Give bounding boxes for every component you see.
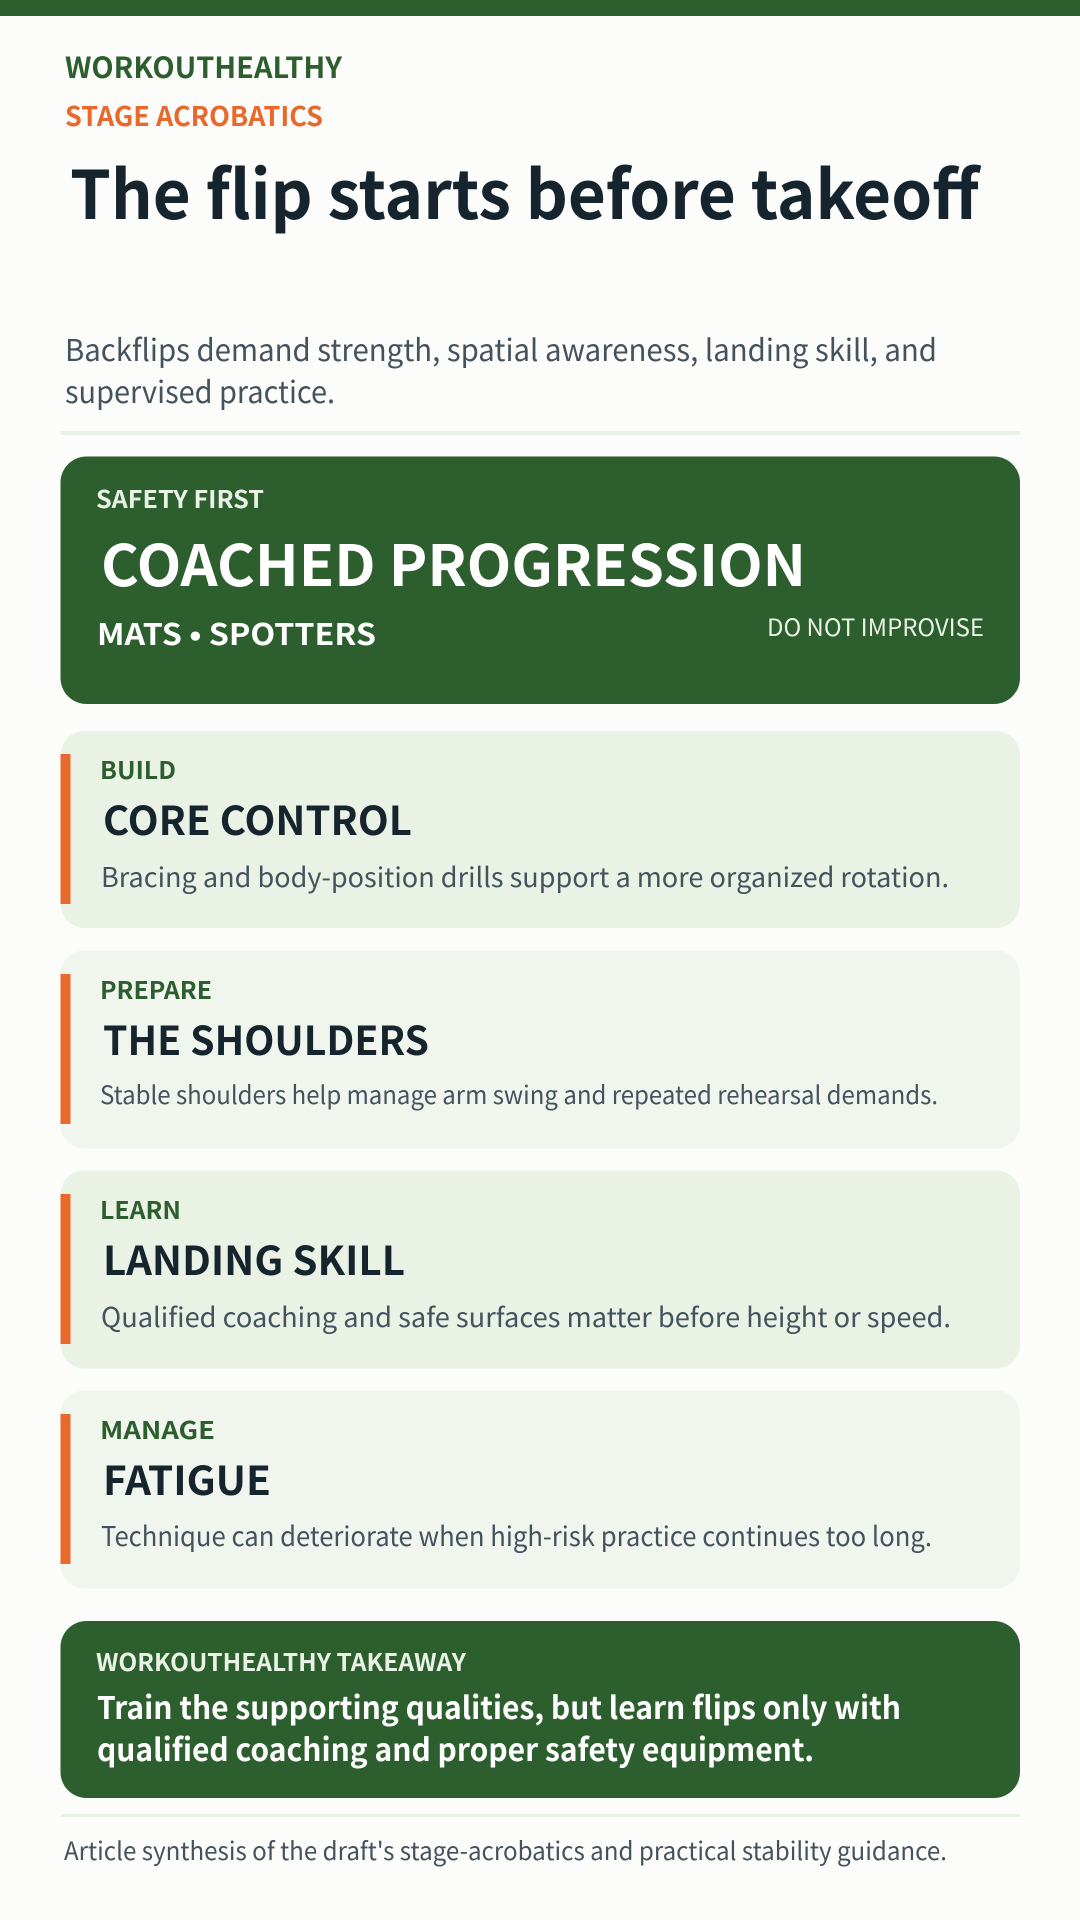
subtitle: supervised practice. (65, 368, 335, 412)
category label: STAGE ACROBATICS (65, 95, 323, 134)
brand name: WORKOUTHEALTHY (65, 45, 343, 87)
accent bar (60, 974, 70, 1124)
footer note: Article synthesis of the draft's stage-acrobatics and practical stability guidance. (64, 1832, 947, 1868)
safety label: SAFETY FIRST (96, 480, 264, 515)
accent bar (60, 754, 70, 904)
panel: manage (60, 1390, 1020, 1588)
accent bar (60, 1194, 70, 1344)
subtitle (65, 326, 937, 412)
panel: learn (60, 1170, 1020, 1368)
label: MANAGE (100, 1411, 215, 1446)
panel: safety first (60, 456, 1020, 704)
takeaway body: qualified coaching and proper safety equipment. (97, 1725, 814, 1770)
safety warning: DO NOT IMPROVISE (767, 608, 984, 643)
label: LEARN (100, 1191, 181, 1226)
takeaway body: Train the supporting qualities, but learn flips only with (97, 1683, 901, 1728)
panel: takeaway (60, 1621, 1020, 1798)
subtitle: Backflips demand strength, spatial awareness, landing skill, and (65, 326, 937, 370)
title: The flip starts before takeoff (70, 142, 982, 239)
heading: LANDING SKILL (103, 1229, 405, 1287)
panel: build (60, 731, 1020, 928)
description: Stable shoulders help manage arm swing and repeated rehearsal demands. (100, 1076, 938, 1112)
heading: CORE CONTROL (103, 789, 412, 847)
takeaway body (97, 1683, 901, 1770)
heading: FATIGUE (103, 1449, 271, 1507)
takeaway label: WORKOUTHEALTHY TAKEAWAY (96, 1643, 467, 1678)
description: Bracing and body-position drills support a more organized rotation. (101, 856, 949, 895)
top accent bar (0, 0, 1080, 16)
description: Qualified coaching and safe surfaces matter before height or speed. (101, 1296, 951, 1335)
safety equipment: MATS • SPOTTERS (97, 610, 376, 654)
heading: THE SHOULDERS (103, 1009, 429, 1067)
header (65, 45, 982, 412)
accent bar (60, 1414, 70, 1564)
description: Technique can deteriorate when high-risk practice continues too long. (101, 1515, 932, 1554)
label: BUILD (100, 751, 176, 786)
label: PREPARE (100, 971, 212, 1006)
panel: prepare (60, 950, 1020, 1148)
safety headline: COACHED PROGRESSION (101, 521, 806, 603)
